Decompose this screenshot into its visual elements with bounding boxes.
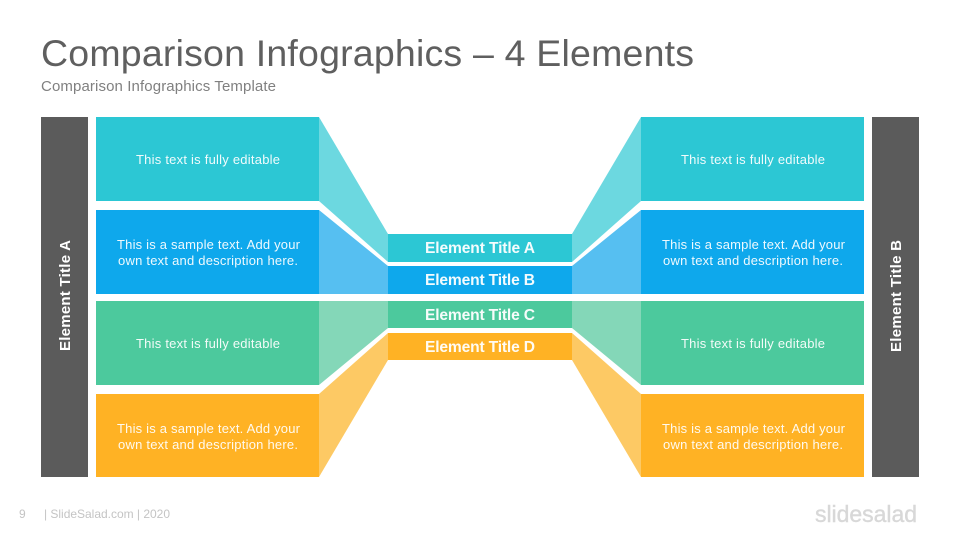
panel: left orange box: This is a sample text. Add your: [117, 421, 301, 436]
label: Element Title A: Element Title A: [57, 240, 74, 351]
connector: left light trapezoids: [319, 117, 388, 477]
center bar: Element Title A: Element Title A: [425, 240, 535, 257]
label: Element Title B: Element Title B: [888, 240, 905, 352]
center bar: Element Title B: Element Title B: [425, 272, 535, 289]
connector: right light trapezoids: [572, 117, 641, 477]
center bar: Element Title C: Element Title C: [425, 307, 535, 324]
panel: right blue box: This is a sample text. Add your: [662, 237, 846, 252]
panel: left teal box: [96, 117, 319, 201]
panel: left orange box: own text and description here.: [118, 437, 298, 452]
panel: right orange box: This is a sample text. Add your: [662, 421, 846, 436]
panel: right orange box: [641, 394, 864, 477]
panel: left green box: [96, 301, 319, 385]
panel: right green box: This text is fully editable: [681, 336, 825, 351]
panel: left green box: This text is fully editable: [136, 336, 280, 351]
center bar: Element Title B: [388, 266, 572, 294]
center bar: Element Title D: Element Title D: [425, 339, 535, 356]
footer: site and year: | SlideSalad.com | 2020: [44, 507, 170, 521]
panel: left teal box: This text is fully editable: [136, 152, 280, 167]
panel: right blue box: own text and description here.: [663, 253, 843, 268]
panel: left blue box: own text and description here.: [118, 253, 298, 268]
panel: right blue box: [641, 210, 864, 294]
panel: right title bar: [872, 117, 919, 477]
center bar: Element Title C: [388, 301, 572, 328]
footer: page number: 9: [19, 507, 26, 521]
panel: left orange box: [96, 394, 319, 477]
center bar: Element Title A: [388, 234, 572, 262]
panel: left title bar: [41, 117, 88, 477]
logo: slidesalad: slidesalad: [815, 501, 917, 527]
panel: left blue box: [96, 210, 319, 294]
panel: right teal box: [641, 117, 864, 201]
panel: right teal box: This text is fully editable: [681, 152, 825, 167]
panel: right green box: [641, 301, 864, 385]
title: Comparison Infographics – 4 Elements: [41, 32, 694, 74]
center bar: Element Title D: [388, 333, 572, 360]
subtitle: Comparison Infographics Template: [41, 78, 276, 95]
panel: left blue box: This is a sample text. Add your: [117, 237, 301, 252]
panel: right orange box: own text and description here.: [663, 437, 843, 452]
